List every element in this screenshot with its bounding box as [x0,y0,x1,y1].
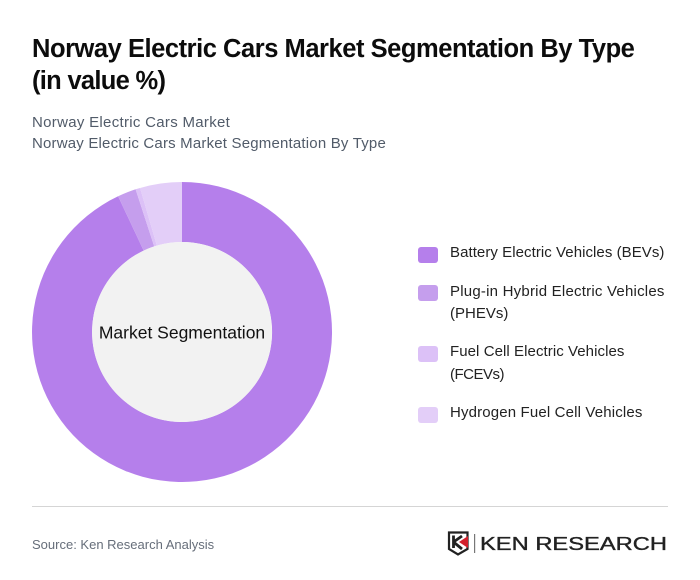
centre label: Market Segmentation [99,322,265,342]
donut centre [92,242,272,422]
legend label: PHEVs: (PHEVs) [450,305,508,322]
legend label: BEVs: Battery Electric Vehicles (BEVs) [450,244,664,261]
legend swatch: hydrogen [418,407,438,423]
title: (in value %) [32,67,165,95]
donut chart [32,182,332,482]
subtitle: Norway Electric Cars Market Segmentation By Type [32,135,386,152]
legend label: FCEVs: Fuel Cell Electric Vehicles [450,343,624,360]
legend label: hydrogen: Hydrogen Fuel Cell Vehicles [450,404,642,421]
legend swatch: FCEVs [418,346,438,362]
legend swatch: BEVs [418,247,438,263]
logo: Ken Research [448,531,667,556]
title [32,35,634,95]
slice: hydrogen fuel cell vehicles [140,182,182,246]
footer divider [32,506,668,507]
legend label: PHEVs [450,282,665,322]
slice: plug-in hybrid electric vehicles [118,189,154,251]
legend label: FCEVs [450,343,624,382]
title: Norway Electric Cars Market Segmentation By Type [32,35,634,63]
logo divider [474,534,475,553]
legend label: PHEVs: Plug-in Hybrid Electric Vehicles [450,282,665,300]
logo shield [449,532,468,554]
legend label: FCEVs: (FCEVs) [450,366,504,382]
subtitle: Norway Electric Cars Market [32,114,230,131]
subtitle [32,114,386,152]
slice: battery electric vehicles [32,182,332,482]
source note: Source: Ken Research Analysis [32,537,214,552]
legend swatch: PHEVs [418,285,438,301]
logo wordmark: KEN RESEARCH [480,534,667,554]
slice: fuel cell electric vehicles [136,188,157,246]
